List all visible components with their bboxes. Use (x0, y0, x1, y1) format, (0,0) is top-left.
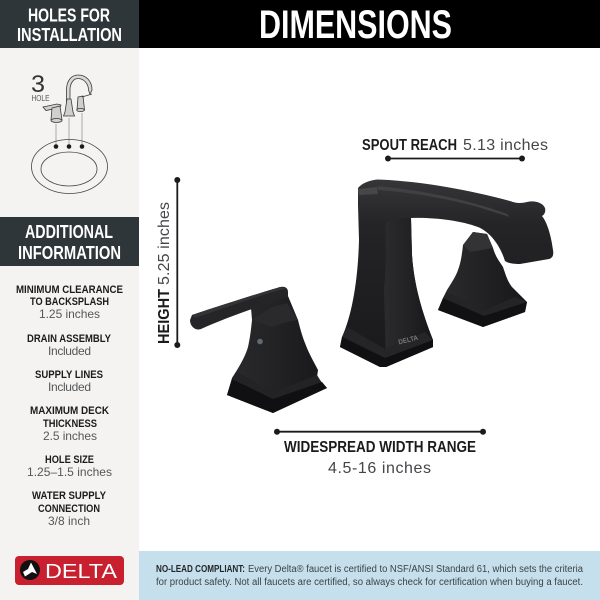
product: delta mark on body: DELTA (398, 335, 419, 346)
product: right handle (438, 232, 527, 327)
dimension: spout reach: SPOUT REACH (362, 137, 457, 154)
heading: holes for installation (0, 0, 139, 48)
spec: minimum clearance: MINIMUM CLEARANCE (16, 284, 123, 296)
spec: supply lines: Included (48, 380, 91, 394)
spec: hole size: 1.25–1.5 inches (27, 465, 112, 479)
spec: drain assembly: Included (48, 344, 91, 358)
heading: holes for installation: HOLES FOR (28, 6, 110, 26)
dimension: spout reach (362, 137, 548, 162)
label: 3 hole (31, 71, 50, 103)
dimension: height: 5.25 inches (156, 202, 173, 285)
dimension: spout reach: 5.13 inches (463, 137, 548, 154)
label: 3 hole: HOLE (32, 94, 50, 103)
spec: minimum clearance: TO BACKSPLASH (30, 296, 109, 308)
spec: water supply connection (32, 490, 107, 528)
dimension: height (156, 177, 180, 348)
logo: delta: DELTA (45, 560, 117, 583)
dimension: widespread width range: 4.5-16 inches (328, 460, 431, 477)
spec: maximum deck thickness (30, 405, 109, 443)
title: dimensions: DIMENSIONS (259, 3, 452, 47)
dimension: widespread width range (274, 429, 486, 477)
callout: no-lead compliant: Every Delta® faucet is certified to NSF/ANSI Standard 61, which sets the criteria (248, 564, 583, 575)
dimension: widespread width range: WIDESPREAD WIDTH RANGE (284, 439, 476, 456)
dimension: height: HEIGHT (156, 289, 173, 344)
product: left handle (190, 287, 327, 413)
panel: additional information (0, 217, 139, 528)
icon: supply lines (56, 113, 82, 144)
spec: drain assembly (27, 333, 112, 358)
logo: delta (15, 556, 124, 585)
callout: no-lead compliant: NO-LEAD COMPLIANT: (156, 564, 245, 575)
heading: additional information: ADDITIONAL (25, 222, 113, 242)
callout: no-lead compliant (139, 551, 600, 600)
spec: supply lines: SUPPLY LINES (35, 369, 103, 381)
spec: hole size: HOLE SIZE (45, 454, 94, 466)
spec: minimum clearance: 1.25 inches (39, 307, 100, 321)
spec: water supply connection: WATER SUPPLY (32, 490, 107, 502)
icon: sink basin (32, 140, 108, 194)
label: 3 hole: 3 (31, 71, 45, 98)
spec: water supply connection: 3/8 inch (48, 514, 90, 528)
spec: maximum deck thickness: THICKNESS (43, 418, 97, 430)
spec: drain assembly: DRAIN ASSEMBLY (27, 333, 112, 345)
heading: additional information: INFORMATION (18, 243, 121, 263)
spec: maximum deck thickness: 2.5 inches (43, 429, 97, 443)
product: faucet spout and body (340, 180, 553, 367)
heading: additional information (0, 217, 139, 266)
spec: supply lines (35, 369, 103, 394)
spec: minimum clearance (16, 284, 123, 321)
callout: no-lead compliant: for product safety. Not all faucets are certified, so always check for certification when buying a faucet. (156, 577, 583, 588)
title: dimensions (139, 0, 600, 48)
icon: faucet line drawing (43, 75, 92, 122)
spec: maximum deck thickness: MAXIMUM DECK (30, 405, 109, 417)
spec: water supply connection: CONNECTION (38, 503, 100, 515)
sidebar background (0, 0, 139, 600)
spec: hole size (27, 454, 112, 479)
panel: holes for installation (0, 0, 139, 194)
heading: holes for installation: INSTALLATION (17, 25, 122, 45)
